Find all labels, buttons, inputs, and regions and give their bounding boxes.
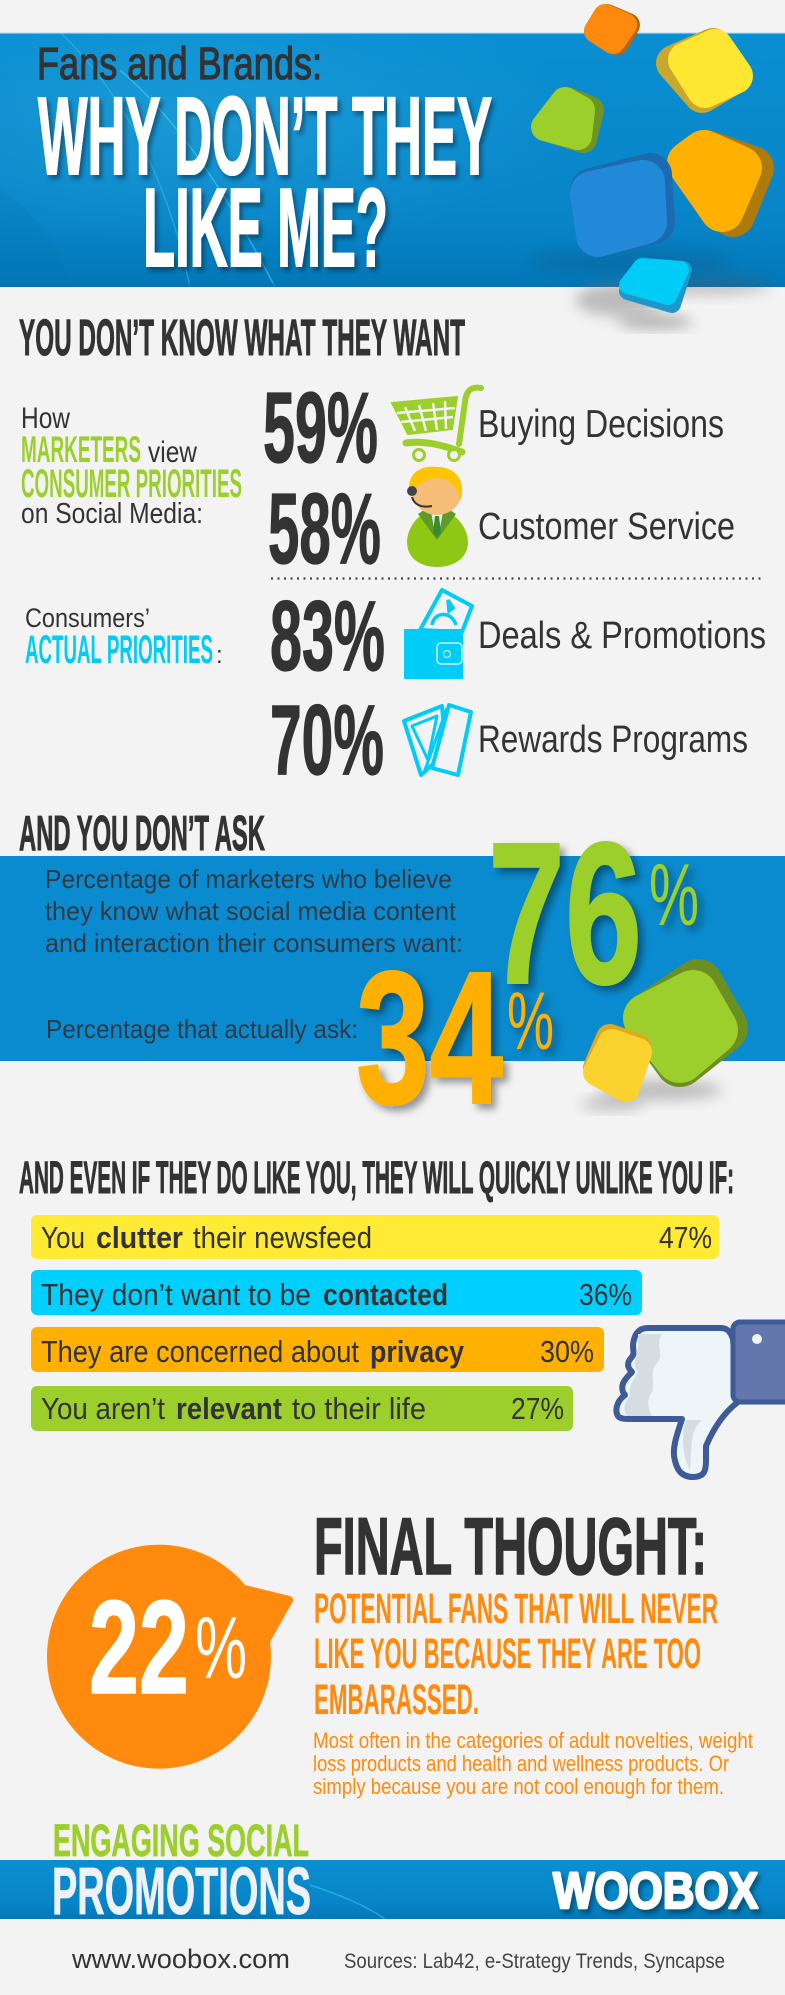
stat: 70 percent rewards programs: 70% — [270, 684, 384, 795]
bar: contacted 36 percent: They don’t want to be — [41, 1277, 311, 1312]
stat: 83 percent deals and promotions — [270, 580, 766, 691]
bar: privacy 30 percent: privacy — [370, 1334, 465, 1369]
callout: 22 percent speech bubble — [47, 1545, 293, 1769]
icon: customer service agent — [407, 467, 468, 567]
stat: 70 percent rewards programs — [270, 684, 748, 795]
text: promotions: PROMOTIONS — [52, 1854, 311, 1929]
bar: privacy 30 percent: They are concerned about — [41, 1334, 359, 1369]
heading: engaging social: ENGAGING SOCIAL — [53, 1815, 309, 1866]
bar: relevant 27 percent: to their life — [292, 1391, 426, 1426]
text: sources: Sources: Lab42, e-Strategy Trends, Syncapse — [344, 1950, 725, 1973]
stat: 58 percent customer service: 58% — [268, 473, 381, 585]
bar: privacy 30 percent — [31, 1327, 604, 1372]
callout: 22 percent speech bubble: 22 — [89, 1574, 189, 1722]
icon: thumbs down — [616, 1322, 785, 1477]
stat: 76 percent: 76 — [488, 800, 642, 1026]
stat: 59 percent buying decisions: 59% — [263, 372, 378, 484]
bar: relevant 27 percent: You aren’t — [41, 1391, 165, 1426]
bar: contacted 36 percent: contacted — [323, 1277, 448, 1312]
panel: header banner: LIKE ME? — [143, 166, 388, 290]
block: yellow — [597, 1038, 638, 1088]
icon: wallet with banknote — [404, 590, 472, 679]
block: cyan — [628, 267, 683, 304]
icon: floating coloured blocks — [530, 16, 770, 328]
bar: clutter 47 percent — [31, 1215, 719, 1259]
text block: marketers view consumer priorities — [21, 402, 242, 530]
infographic canvas: ACTUAL PRIORITIES — [25, 628, 213, 672]
panel: footer banner — [0, 1854, 785, 1929]
text block: final thought detail — [313, 1728, 753, 1799]
panel: header banner — [0, 32, 785, 290]
block: green — [545, 101, 590, 139]
bar: contacted 36 percent — [31, 1270, 642, 1315]
bar: privacy 30 percent: 30% — [540, 1334, 594, 1369]
text block: consumers' actual priorities — [25, 603, 223, 672]
panel: and you don't ask band — [0, 856, 785, 1061]
stat: 58 percent customer service — [268, 467, 735, 585]
text block: consumers' actual priorities: Consumers’ — [25, 603, 150, 633]
bar: contacted 36 percent: 36% — [579, 1277, 632, 1312]
stat: 76 percent: % — [649, 845, 699, 944]
text block: potential fans: EMBARASSED. — [314, 1676, 479, 1724]
stat: 34 percent: 34 — [356, 933, 503, 1144]
text block: marketers who believe: and interaction their consumers want: — [45, 928, 463, 958]
text block: marketers view consumer priorities: on Social Media: — [21, 498, 203, 530]
text block: marketers who believe: they know what social media content — [45, 896, 457, 926]
block: green — [648, 984, 723, 1062]
stat: 83 percent deals and promotions: 83% — [270, 580, 385, 691]
bar: relevant 27 percent: relevant — [176, 1391, 282, 1426]
divider: dotted line — [271, 577, 764, 580]
text block: marketers view consumer priorities: MARKETERS — [21, 429, 141, 470]
bar: clutter 47 percent: clutter — [96, 1220, 183, 1255]
icon: green and yellow blocks — [580, 984, 723, 1110]
callout: 22 percent speech bubble: % — [195, 1598, 247, 1697]
text block: marketers who believe: Percentage of marketers who believe — [45, 864, 452, 894]
bar: relevant 27 percent: 27% — [511, 1391, 564, 1426]
text block: marketers view consumer priorities: How — [21, 402, 70, 435]
text block: consumers' actual priorities: : — [216, 642, 223, 669]
infographic canvas: AND YOU DON’T ASK — [19, 807, 265, 861]
stat: 59 percent buying decisions — [263, 372, 724, 484]
icon: reward cards — [404, 705, 471, 775]
text block: marketers who believe — [45, 864, 463, 958]
icon: shopping cart — [392, 388, 481, 460]
logo: woobox: WOOBOX — [553, 1862, 758, 1919]
block: amber — [689, 152, 752, 215]
block: small orange — [596, 16, 628, 43]
block: yellow — [674, 46, 735, 95]
stat: 34 percent: % — [507, 976, 554, 1067]
text block: potential fans — [314, 1585, 718, 1724]
bar: clutter 47 percent: You — [41, 1220, 85, 1255]
text: percentage that actually ask: Percentage that actually ask: — [46, 1014, 358, 1044]
text: website: www.woobox.com — [71, 1944, 290, 1974]
bar: relevant 27 percent — [31, 1386, 573, 1431]
infographic canvas: CONSUMER PRIORITIES — [21, 462, 242, 506]
bar: clutter 47 percent: their newsfeed — [193, 1220, 372, 1255]
heading: fans and brands: Fans and Brands: — [37, 38, 322, 89]
bar: clutter 47 percent: 47% — [659, 1220, 712, 1255]
text block: marketers view consumer priorities: view — [148, 436, 197, 469]
label: customer service: Customer Service — [478, 506, 735, 548]
label: buying decisions: Buying Decisions — [478, 403, 724, 446]
block: blue — [592, 175, 653, 235]
